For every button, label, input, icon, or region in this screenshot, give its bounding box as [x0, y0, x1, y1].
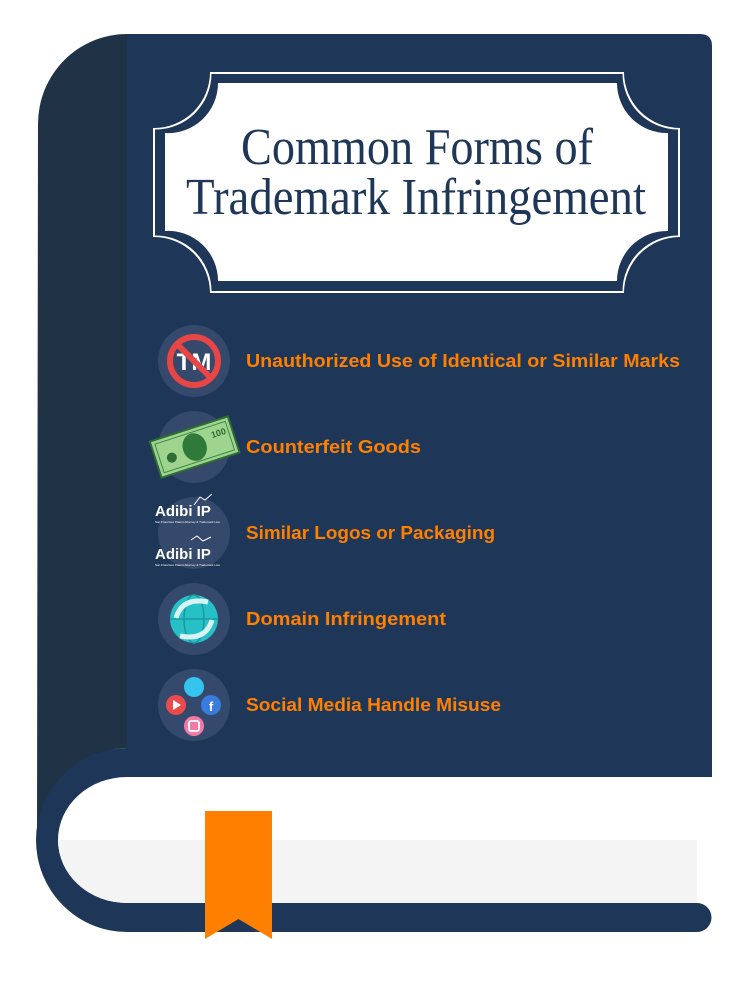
icon: two logos: San Francisco Patent Attorney & Trademark Law	[155, 563, 221, 567]
bookmark ribbon	[205, 811, 272, 939]
icon: two logos	[155, 494, 230, 569]
item 1: unauthorized use	[158, 325, 680, 397]
item 4: domain	[158, 583, 446, 655]
item 2: counterfeit goods	[150, 411, 421, 483]
item 4: domain: Domain Infringement	[246, 608, 446, 629]
icon: two logos: San Francisco Patent Attorney & Trademark Law	[155, 520, 221, 524]
item 5: social media	[158, 669, 501, 741]
item 3: similar logos	[155, 494, 495, 569]
icon: no TM	[158, 325, 230, 397]
title frame	[153, 72, 680, 293]
icon: dollar bill: 100	[210, 426, 227, 440]
book pages base	[36, 748, 713, 932]
item 5: social media: Social Media Handle Misuse	[246, 694, 501, 715]
icon: two logos: Adibi IP	[155, 503, 211, 520]
title frame: Trademark Infringement	[186, 169, 646, 226]
icon: social media: f	[209, 699, 214, 714]
icon: no TM: TM	[177, 349, 211, 376]
icon: globe with arrows	[158, 583, 230, 655]
item 3: similar logos: Similar Logos or Packaging	[246, 522, 495, 543]
icon: social media	[158, 669, 230, 741]
item 1: unauthorized use: Unauthorized Use of Identical or Similar Marks	[246, 350, 680, 371]
item 2: counterfeit goods: Counterfeit Goods	[246, 436, 421, 457]
title text: Common Forms of	[241, 119, 594, 176]
icon: two logos: Adibi IP	[155, 546, 211, 563]
icon: dollar bill	[150, 411, 240, 483]
book cover	[37, 34, 712, 840]
